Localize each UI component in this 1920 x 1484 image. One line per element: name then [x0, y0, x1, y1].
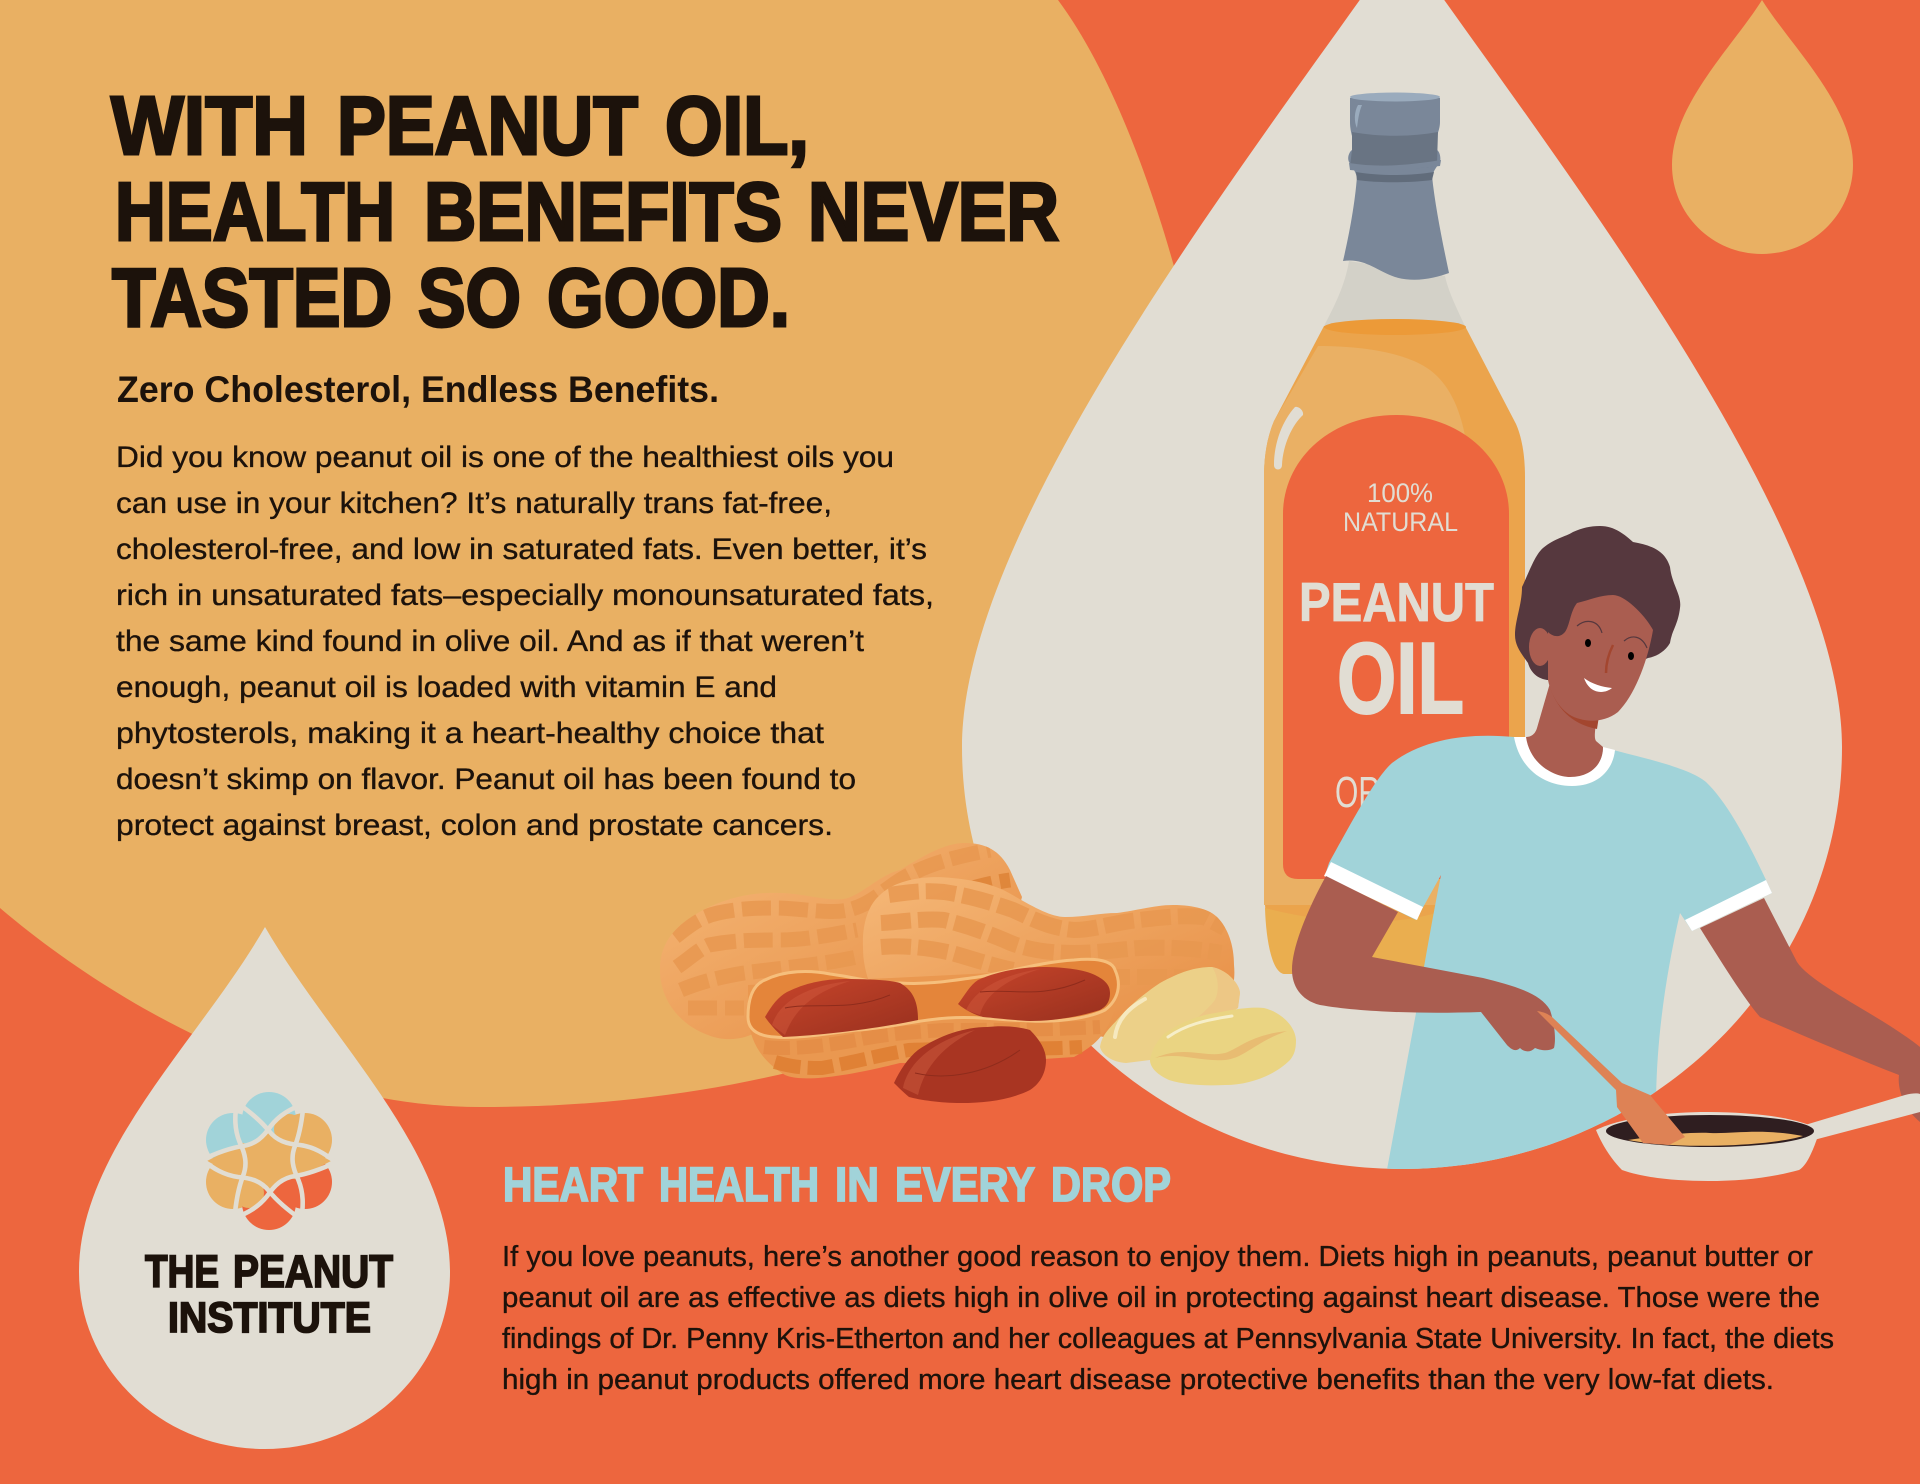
subheading: Zero Cholesterol, Endless Benefits. — [117, 369, 719, 410]
title: WITH — [111, 79, 308, 172]
bottle cap — [1348, 92, 1441, 183]
oil surface — [1324, 319, 1466, 335]
large cream oil drop — [962, 0, 1842, 1169]
person cooking — [1292, 526, 1920, 1175]
bottle body — [1264, 326, 1525, 974]
blanched peanut back — [1100, 967, 1240, 1063]
intro paragraph: rich in unsaturated fats–especially monounsaturated fats, — [116, 579, 934, 612]
title — [111, 79, 1059, 344]
front peanut — [863, 877, 1234, 1040]
bottle glass neck — [1324, 261, 1465, 326]
bottle light reflection — [1264, 346, 1465, 905]
intro paragraph: doesn’t skimp on flavor. Peanut oil has been found to — [116, 763, 856, 796]
right sleeve band — [1685, 880, 1772, 931]
hair — [1515, 526, 1680, 680]
logo wordmark: INSTITUTE — [168, 1294, 371, 1342]
heart health heading: IN — [835, 1159, 879, 1212]
small yellow oil drop — [1672, 0, 1853, 254]
intro paragraph: can use in your kitchen? It’s naturally trans fat-free, — [116, 487, 832, 520]
ear — [1529, 628, 1551, 666]
peanuts group — [660, 843, 1296, 1103]
title: SO — [418, 251, 521, 344]
facial features — [1577, 621, 1647, 692]
pan interior — [1606, 1115, 1814, 1147]
heart health heading: DROP — [1051, 1159, 1171, 1212]
title: TASTED — [112, 251, 392, 344]
heart health paragraph: findings of Dr. Penny Kris-Etherton and her colleagues at Pennsylvania State University. In fact, the diets — [502, 1323, 1834, 1355]
red peanut right — [958, 967, 1110, 1021]
label text: 100% — [1367, 478, 1433, 508]
icon: peanut institute knot logo — [184, 1073, 354, 1249]
open shell — [748, 959, 1119, 1078]
heart health paragraph — [502, 1241, 1834, 1396]
left sleeve band — [1324, 862, 1423, 920]
oil in pan — [1628, 1132, 1803, 1146]
heart health paragraph: peanut oil are as effective as diets high in olive oil in protecting against heart disease. Those were the — [502, 1282, 1820, 1314]
yellow background shape — [0, 0, 1300, 1107]
logo wordmark — [145, 1246, 393, 1342]
logo wordmark: PEANUT — [233, 1246, 393, 1297]
bottle base tint — [1265, 908, 1470, 974]
face — [1548, 595, 1653, 721]
neck — [1526, 683, 1603, 777]
collar — [1514, 737, 1615, 786]
blanched peanut front — [1150, 1008, 1296, 1085]
logo wordmark: THE — [145, 1246, 219, 1297]
title: BENEFITS — [424, 165, 782, 258]
heart health heading: HEALTH — [659, 1159, 819, 1212]
intro paragraph: the same kind found in olive oil. And as if that weren’t — [116, 625, 865, 658]
back peanut — [660, 843, 1022, 1039]
heart health heading — [503, 1159, 1171, 1212]
drop shape — [79, 927, 450, 1449]
intro paragraph: cholesterol-free, and low in saturated fats. Even better, it’s — [116, 533, 927, 566]
wooden spatula — [1537, 1011, 1685, 1145]
heart health heading: EVERY — [895, 1159, 1035, 1212]
heart health paragraph: If you love peanuts, here’s another good reason to enjoy them. Diets high in peanuts, peanut butter or — [502, 1241, 1813, 1273]
heart health paragraph: high in peanut products offered more heart disease protective benefits than the very low-fat diets. — [502, 1364, 1774, 1396]
right arm — [1700, 898, 1920, 1122]
jaw shadow — [1550, 687, 1599, 729]
pan handle — [1805, 1093, 1920, 1141]
intro paragraph — [116, 441, 934, 842]
label text — [1299, 478, 1494, 817]
label text: PEANUT — [1299, 571, 1494, 633]
t-shirt — [1325, 736, 1772, 1175]
heart health heading: HEART — [503, 1159, 643, 1212]
intro paragraph: protect against breast, colon and prostate cancers. — [116, 809, 833, 842]
title: OIL, — [665, 79, 809, 172]
neck foil sleeve — [1343, 176, 1449, 280]
glass highlight — [1274, 407, 1303, 470]
bottle label — [1283, 415, 1509, 879]
intro paragraph: phytosterols, making it a heart-healthy choice that — [116, 717, 825, 750]
red peanut front — [894, 1026, 1046, 1103]
pan body — [1596, 1112, 1820, 1181]
label text: NATURAL — [1343, 507, 1458, 537]
frying pan — [1596, 1093, 1920, 1181]
title: HEALTH — [115, 165, 395, 258]
left arm — [1292, 876, 1555, 1051]
label text: ORGANIC — [1335, 768, 1475, 817]
red peanut left — [765, 979, 918, 1037]
title: PEANUT — [337, 79, 638, 172]
intro paragraph: enough, peanut oil is loaded with vitamin E and — [116, 671, 777, 704]
intro paragraph: Did you know peanut oil is one of the healthiest oils you — [116, 441, 894, 474]
title: GOOD. — [547, 251, 790, 344]
oil bottle — [1264, 92, 1525, 974]
logo drop panel — [79, 927, 450, 1449]
label text: OIL — [1337, 623, 1464, 735]
title: NEVER — [808, 165, 1059, 258]
